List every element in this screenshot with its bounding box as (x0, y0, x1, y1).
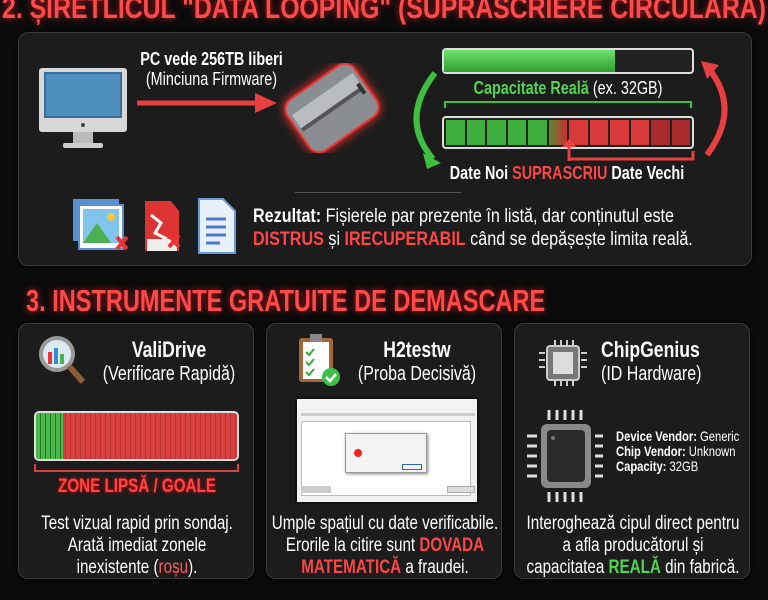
text: PC sees: (Minciuna Firmware) (146, 69, 277, 89)
chart: validrive bar (34, 411, 239, 461)
heading: ChipGenius (601, 337, 700, 362)
text: Interoghează cipul direct pentru (527, 513, 739, 534)
heading: (ID Hardware) (601, 363, 701, 385)
icon: external drive (277, 63, 387, 153)
text: Arată imediat zonele (68, 535, 206, 556)
panel: ValiDrive (18, 323, 254, 579)
heading (103, 337, 235, 385)
text: PC sees (140, 49, 283, 89)
heading: H2testw (383, 337, 451, 362)
text: result (253, 206, 693, 250)
text (527, 513, 739, 578)
panel: ChipGenius (514, 323, 750, 579)
title: section 3: 3. INSTRUMENTE GRATUITE DE DEMASCARE (26, 283, 545, 318)
icon: chip small (539, 340, 587, 386)
text: result: Rezultat: Fișierele par prezente în listă, dar conținutul este (253, 206, 674, 227)
text: PC sees: PC vede 256TB liberi (140, 49, 283, 69)
text: a afla producătorul și (562, 535, 704, 556)
icon: monitor (39, 68, 127, 148)
chart: capacity bars (413, 48, 728, 183)
label: overwrite: Date Noi SUPRASCRIU Date Vechi (450, 163, 684, 183)
bar: segments (442, 116, 694, 149)
text (41, 513, 233, 578)
arrow: red loop (701, 61, 728, 157)
heading (358, 337, 476, 385)
icon: magnifier (39, 336, 86, 384)
panel: H2testw (266, 323, 502, 579)
heading: ValiDrive (132, 337, 206, 362)
text: Umple spațiul cu date verificabile. (272, 513, 498, 534)
arrow: red to drive (137, 93, 277, 113)
text (272, 513, 498, 578)
icon: clipboard (299, 334, 340, 386)
bar: top (442, 48, 694, 74)
text: capacitatea REALĂ din fabrică. (527, 557, 739, 578)
text: chip info: Device Vendor: Generic (616, 428, 739, 444)
icon: chip large (527, 410, 603, 502)
icons: broken files (73, 198, 236, 254)
text: inexistente (roșu). (77, 557, 197, 578)
label: real capacity: Capacitate Reală (ex. 32GB) (474, 78, 662, 98)
heading: (Verificare Rapidă) (103, 363, 235, 385)
text: result: DISTRUS și IRECUPERABIL când se depășește limita reală. (253, 229, 693, 250)
text: Erorile la citire sunt DOVADA (286, 535, 484, 556)
text: Test vizual rapid prin sondaj. (41, 513, 233, 534)
text: chip info: Chip Vendor: Unknown (616, 443, 736, 459)
screenshot: error window (295, 397, 479, 504)
panel: data looping (18, 32, 752, 266)
text: chip info: Capacity: 32GB (616, 458, 698, 474)
heading (601, 337, 701, 385)
heading: (Proba Decisivă) (358, 363, 476, 385)
label: missing zones: ZONE LIPSĂ / GOALE (58, 476, 216, 497)
arrow: green loop (413, 71, 441, 169)
text: MATEMATICĂ a fraudei. (301, 557, 469, 578)
text: chip info (616, 428, 739, 474)
arrow: overwrite (562, 139, 694, 161)
